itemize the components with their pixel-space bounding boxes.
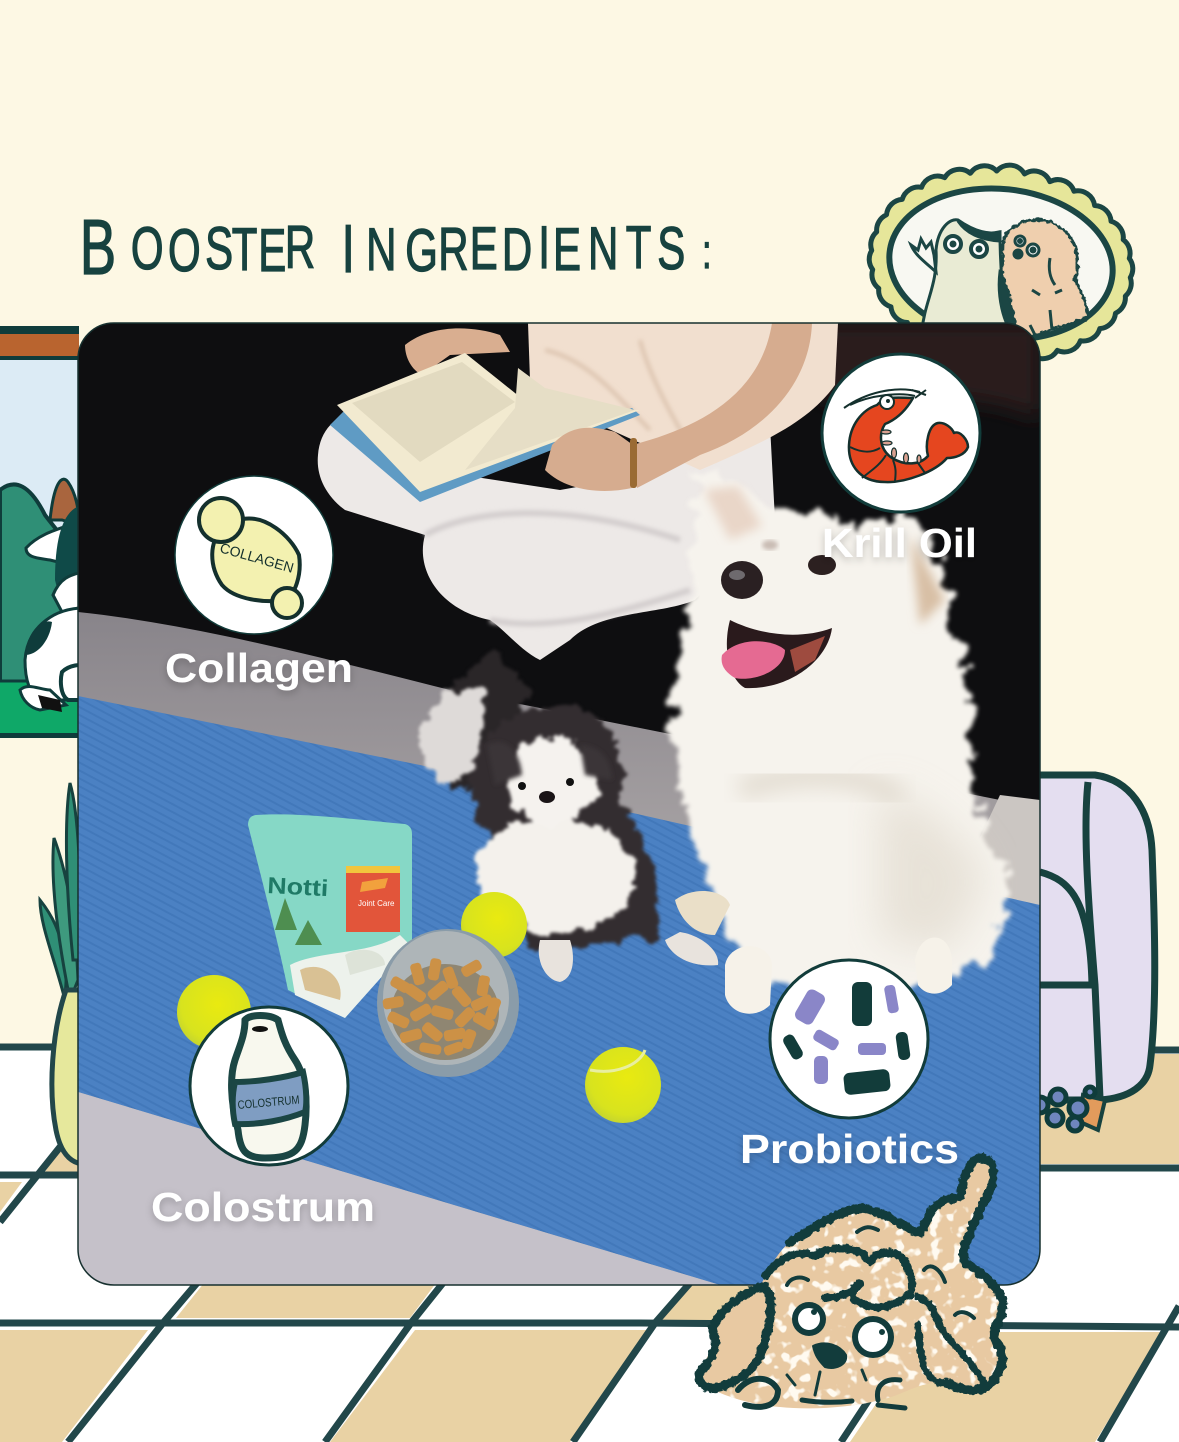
icon: colostrum bottle: COLOSTRUM <box>237 1093 300 1112</box>
title: B <box>80 204 116 291</box>
photo: grey floor <box>78 612 1040 1285</box>
label: probiotics: Probiotics <box>740 1126 959 1172</box>
icon: collagen <box>175 476 333 634</box>
illustration: flower knot <box>1032 1087 1105 1131</box>
icon: colostrum bottle <box>190 1007 348 1165</box>
label: krill oil: Krill Oil <box>822 520 977 566</box>
illustration: lilac armchair <box>1030 775 1155 1100</box>
title: OOSTER <box>131 214 315 284</box>
photo border <box>78 323 1040 1285</box>
photo: tennis balls <box>177 975 661 1123</box>
title: I <box>342 212 355 287</box>
illustration: scalloped portrait medallion <box>860 151 1142 377</box>
title: : <box>702 224 711 278</box>
photo: blue yoga mat <box>78 696 1040 1285</box>
title <box>80 204 711 291</box>
photo panel <box>78 323 1040 1285</box>
illustration: window with cow <box>0 326 82 738</box>
photo: pale floor lower left <box>78 1092 720 1285</box>
icon: collagen: COLLAGEN <box>218 540 296 576</box>
label: collagen: Collagen <box>165 645 353 691</box>
illustration: plant and vase <box>40 783 82 1164</box>
photo: large white dog <box>673 470 1006 1014</box>
photo: Notti treat bag <box>248 814 412 1018</box>
photo: small fluffy dog <box>418 650 718 982</box>
label: colostrum: Colostrum <box>151 1184 375 1230</box>
illustration: cat and poodle in medallion <box>911 220 1088 340</box>
photo: tennis ball beside small dog <box>461 892 527 958</box>
title: NGREDIENTS <box>366 214 685 284</box>
checkered floor <box>0 1047 1179 1442</box>
photo: dark sofa <box>78 323 1040 823</box>
icon: probiotics <box>770 960 928 1118</box>
illustration: poodle peeking at the bottom <box>699 1158 1003 1408</box>
photo: Notti treat bag: Notti <box>267 872 329 901</box>
photo: Notti treat bag: Joint Care <box>358 899 395 908</box>
icon: krill oil shrimp <box>822 354 980 512</box>
photo: bowl of kibble <box>377 929 519 1077</box>
photo: person <box>318 323 838 660</box>
